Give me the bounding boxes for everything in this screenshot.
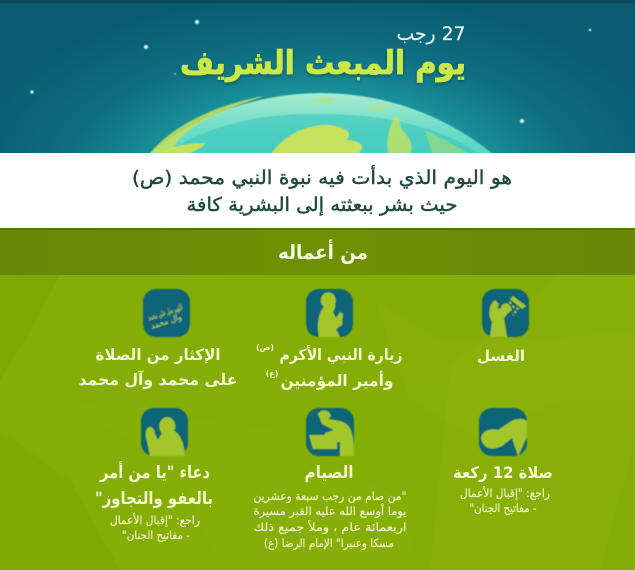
item: supplication	[95, 408, 213, 542]
label: supplication: بالعفو والتجاوز"	[95, 489, 213, 509]
label: abundant prayers on Muhammad	[78, 346, 238, 389]
label: 12 rakat prayer: صلاة 12 ركعة	[453, 463, 553, 482]
item: fasting	[254, 408, 406, 551]
icon: shower	[482, 289, 529, 337]
label: visiting the Prophet and Commander of the Faithful: زيارة النبي الأكرم	[280, 345, 402, 365]
title: day of the Prophet's mission: يوم المبعث الشريف	[180, 43, 466, 83]
item: visiting the Prophet	[256, 289, 402, 390]
hadith text: يوما أوسع الله عليه القبر مسيرة	[254, 503, 406, 519]
label: abundant prayers on Muhammad: الإكثار من الصلاة	[96, 346, 220, 364]
icon: calligraphy: اللهم صل على محمد	[147, 303, 184, 322]
white intro band	[0, 153, 635, 228]
section heading text: من أعماله	[278, 238, 368, 264]
icon: person at table	[306, 408, 354, 456]
source note: - مفاتيح الجنان"	[122, 528, 190, 542]
date: 27 Rajab: 27 رجب	[396, 23, 466, 45]
icon: praying man reading	[306, 289, 353, 337]
source note: راجع: "إقبال الأعمال	[460, 486, 550, 501]
hadith text: اربعمائة عام ، وملأ جميع ذلك	[254, 520, 406, 535]
intro text	[132, 165, 512, 217]
item: 12 rakat prayer	[453, 408, 553, 515]
label: ghusl: الغسل	[477, 347, 525, 365]
stars	[30, 20, 591, 123]
icon: person raising hands	[141, 408, 188, 456]
source note	[110, 513, 200, 542]
label: visiting the Prophet and Commander of the Faithful: (ص)	[256, 343, 274, 353]
icon: prostrating figure	[479, 408, 527, 456]
hadith text	[254, 489, 406, 551]
label: visiting the Prophet and Commander of the Faithful: (ع)	[266, 369, 278, 378]
label: abundant prayers on Muhammad: على محمد وآل محمد	[78, 370, 238, 389]
header: space background with globe	[0, 0, 635, 153]
label: visiting the Prophet and Commander of the Faithful: وأمير المؤمنين	[280, 371, 394, 390]
label: visiting the Prophet and Commander of the Faithful	[256, 343, 402, 390]
intro text: حيث بشر ببعثته إلى البشرية كافة	[186, 194, 458, 217]
source note: راجع: "إقبال الأعمال	[110, 513, 200, 528]
source note: - مفاتيح الجنان"	[470, 501, 536, 515]
intro text: هو اليوم الذي بدأت فيه نبوة النبي محمد (ص)	[132, 165, 512, 189]
hadith text: مسكا وعنبرا" الإمام الرضا (ع)	[264, 536, 394, 551]
source note	[460, 486, 550, 515]
label: fasting: الصيام	[304, 463, 354, 483]
hadith text: "من صام من رجب سبعة وعشرين	[254, 489, 406, 504]
item: ghusl	[477, 289, 529, 365]
item: salawat	[78, 289, 238, 389]
land masses	[150, 97, 468, 153]
green body background with faceted shapes	[0, 228, 635, 570]
section heading band: his deeds	[0, 228, 635, 275]
globe	[150, 92, 492, 153]
label: supplication: دعاء "يا من أمر	[99, 461, 210, 483]
icon: calligraphy	[143, 289, 190, 337]
label: supplication	[95, 461, 213, 509]
icon: calligraphy: وآل محمد	[149, 311, 183, 331]
